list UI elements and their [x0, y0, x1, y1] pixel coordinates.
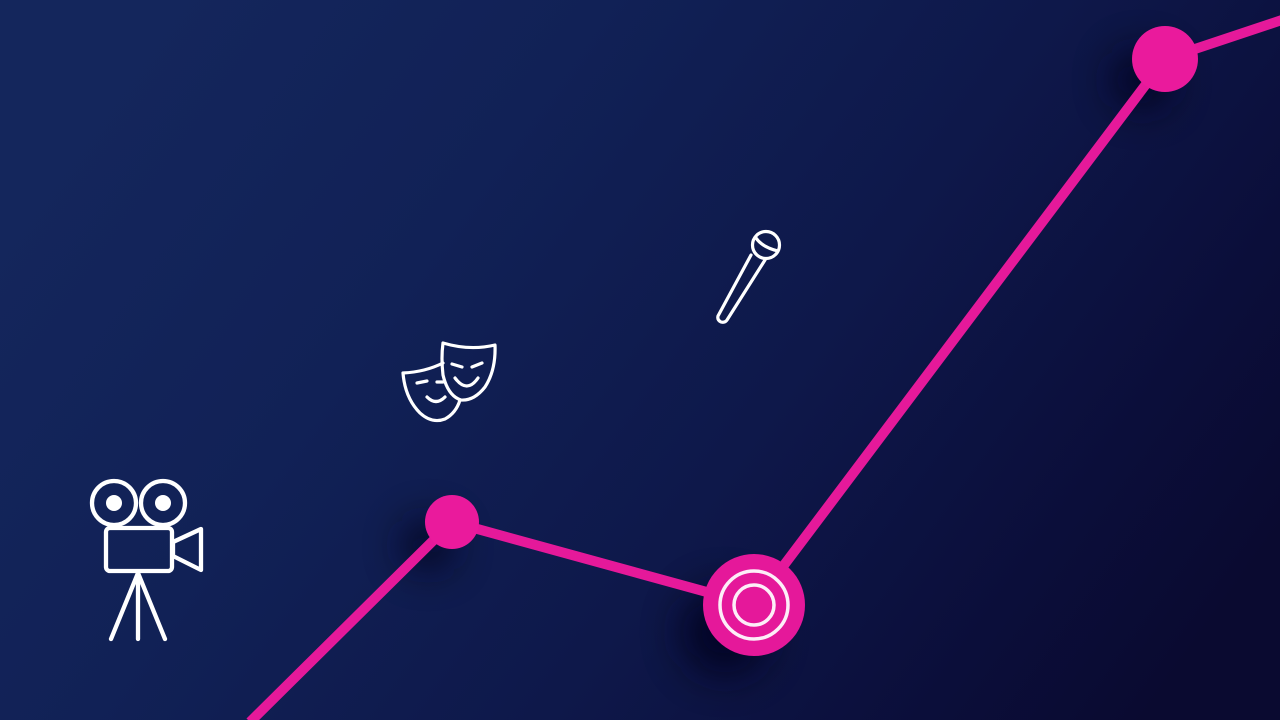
icon: theatre masks: [403, 343, 495, 421]
node shadows: [402, 50, 1172, 676]
line chart: rising trend: [250, 20, 1280, 720]
icon: microphone: [718, 232, 780, 322]
data point 3: [1132, 26, 1198, 92]
trend line: [250, 20, 1280, 720]
icon: film camera on tripod: [92, 481, 201, 639]
data point 2: target marker: [703, 554, 805, 656]
data point 1: [425, 495, 479, 549]
